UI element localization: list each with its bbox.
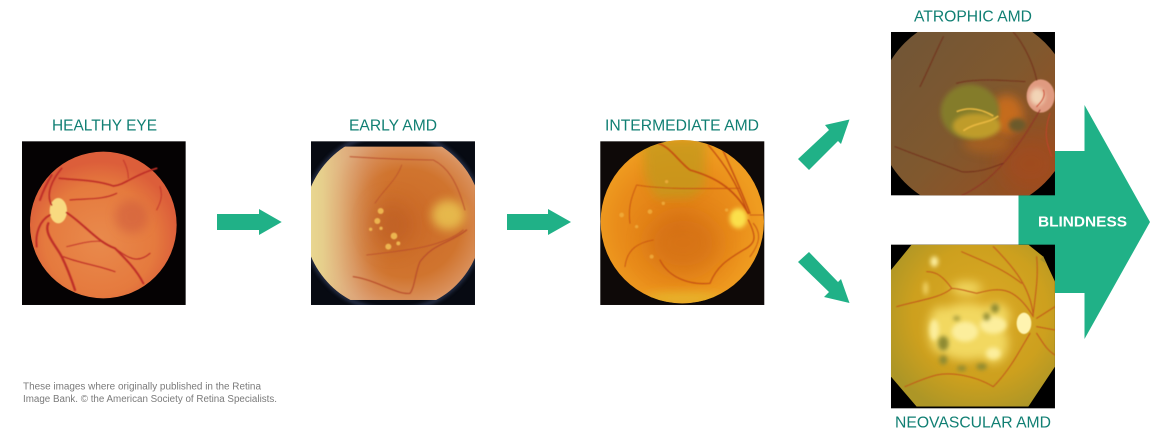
optic disc: [730, 208, 747, 228]
drusen: [619, 180, 728, 259]
footnote: image credit: These images where originally published in the Retina: [23, 381, 261, 392]
arrow: blindness outcome: [1018, 105, 1150, 339]
macula: [115, 200, 148, 233]
pale lesion area: [928, 282, 1010, 363]
heading: neovascular AMD: NEOVASCULAR AMD: [895, 414, 1051, 432]
heading: early AMD: EARLY AMD: [349, 118, 437, 134]
orange glow: [990, 95, 1023, 135]
retinal vessels: [895, 32, 1052, 195]
image notch: [1040, 256, 1047, 264]
image: intermediate AMD fundus: [600, 140, 764, 305]
dark patches: [938, 304, 999, 371]
optic disc: [1017, 313, 1031, 334]
optic disc: [50, 198, 67, 223]
optic disc: [1027, 79, 1055, 113]
label: blindness: BLINDNESS: [1038, 214, 1127, 230]
drusen: [369, 208, 400, 250]
heading: healthy eye: HEALTHY EYE: [52, 118, 157, 134]
retinal vessels: [625, 142, 763, 284]
retinal vessels: [350, 157, 467, 293]
arrow: healthy to early: [217, 209, 282, 235]
retinal vessels: [897, 247, 1055, 387]
image: healthy eye fundus: [22, 141, 186, 305]
dark spot: [1009, 118, 1026, 132]
footnote: image credit: [23, 381, 277, 405]
arrow: intermediate to neovascular: [798, 252, 850, 303]
arrow: intermediate to atrophic: [798, 120, 850, 170]
image: atrophic AMD fundus: [890, 32, 1055, 196]
olive patch: [643, 140, 705, 198]
arrow: early to intermediate: [507, 209, 571, 235]
footnote: image credit: Image Bank. © the American Society of Retina Specialists.: [23, 394, 277, 405]
heading: atrophic AMD: ATROPHIC AMD: [914, 8, 1032, 26]
retinal vessels: [36, 160, 161, 290]
heading: intermediate AMD: INTERMEDIATE AMD: [605, 118, 759, 134]
bright area near disc: [432, 200, 465, 230]
image: neovascular AMD fundus: [891, 245, 1055, 408]
image: early AMD fundus: [311, 141, 475, 305]
atrophic lesion: [941, 84, 999, 139]
